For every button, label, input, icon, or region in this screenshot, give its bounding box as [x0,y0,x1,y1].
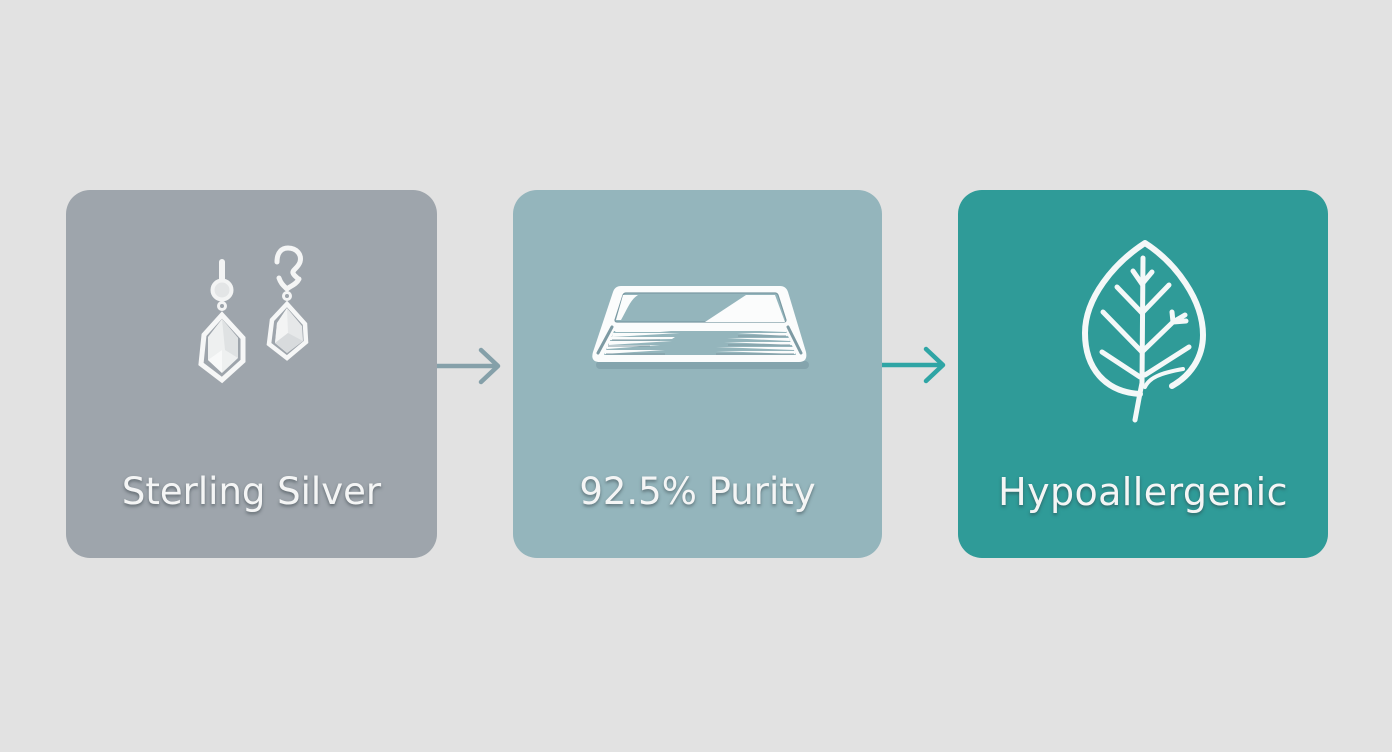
arrow: silver to purity [437,350,498,382]
label: Hypoallergenic: Hypoallergenic [998,470,1288,514]
icon: silver bar [592,286,806,365]
label: Sterling Silver: Sterling Silver [122,470,381,513]
arrow: purity to hypoallergenic [882,349,943,381]
panel: 92.5% Purity [513,190,882,558]
panel: Sterling Silver [66,190,437,558]
panel: Hypoallergenic [958,190,1328,558]
icon: earrings [201,248,306,380]
label: 92.5% Purity: 92.5% Purity [579,470,816,513]
icon: leaf [1085,243,1203,420]
